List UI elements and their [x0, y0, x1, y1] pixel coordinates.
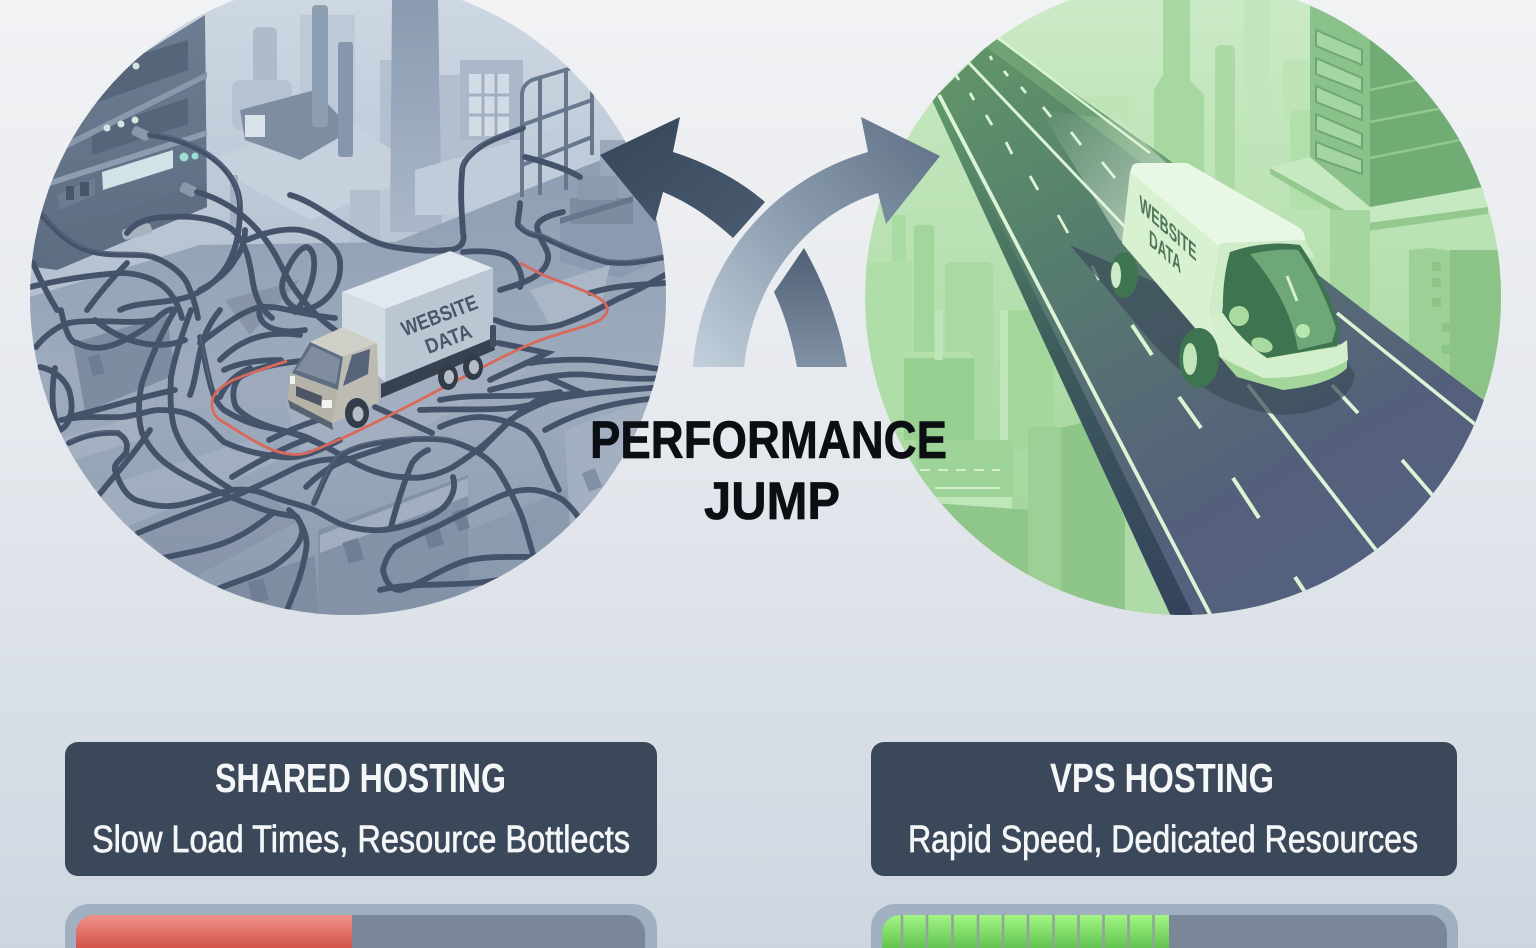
panel: VPS hosting label: [871, 742, 1457, 876]
van: website data: [1110, 163, 1348, 390]
panel: shared hosting label: [65, 742, 657, 876]
heading: performance jump: PERFORMANCE: [590, 411, 947, 470]
panel: VPS hosting illustration: [855, 0, 1515, 630]
server rack: [20, 15, 207, 270]
truck label: DATA: [422, 320, 475, 359]
arrow: lower segment: [774, 248, 847, 367]
progress bar: VPS hosting: [871, 904, 1458, 948]
van label: WEBSITE: [1140, 189, 1196, 267]
speed streaks: [1050, 113, 1166, 242]
van wheels: [1110, 252, 1219, 388]
office tower: [1270, 6, 1488, 231]
highway: [932, 38, 1490, 630]
window grid frame: [522, 67, 592, 197]
truck label: WEBSITE: [398, 291, 481, 341]
VPS hosting description: Rapid Speed, Dedicated Resources: [908, 819, 1418, 861]
shared hosting description: Slow Load Times, Resource Bottlects: [92, 819, 630, 861]
factory skyline: [230, 0, 523, 235]
stacked boxes: [560, 140, 663, 278]
shared hosting title: SHARED HOSTING: [215, 755, 506, 801]
panel: shared hosting illustration: [20, 0, 680, 640]
arrow: back to shared hosting: [600, 117, 765, 238]
red delivery route: [212, 263, 607, 454]
tangled cables: [30, 126, 665, 615]
VPS hosting title: VPS HOSTING: [1050, 755, 1274, 801]
van label: [1140, 194, 1196, 274]
truck label: [400, 294, 479, 354]
van shadow: [1070, 245, 1355, 415]
green city buildings: [866, 0, 1510, 630]
lower floor machinery: [64, 265, 648, 615]
progress bar: shared hosting: [65, 904, 657, 948]
factory floor: [30, 160, 666, 615]
van label: DATA: [1149, 224, 1181, 279]
heading: performance jump: JUMP: [704, 472, 840, 531]
arrow: jump to VPS hosting: [693, 117, 940, 367]
heading: performance jump: [590, 411, 947, 531]
truck: website data: [288, 251, 496, 430]
